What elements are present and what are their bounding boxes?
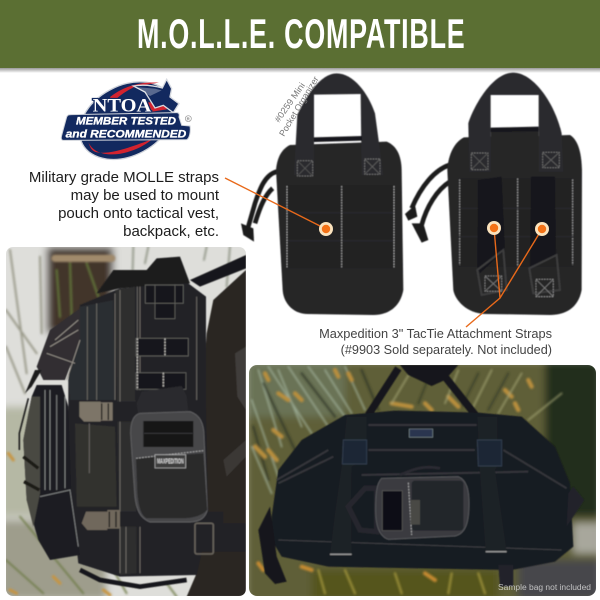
photo: duffel bag with pouch bbox=[245, 360, 600, 600]
upper side pocket bbox=[37, 308, 80, 380]
pouch model label: Pocket Organizer bbox=[277, 75, 321, 138]
lower side pocket bbox=[23, 385, 80, 560]
compression straps bbox=[332, 541, 352, 544]
pouch: back view with TacTie straps bbox=[405, 73, 582, 315]
title: M.O.L.L.E. COMPATIBLE bbox=[137, 11, 465, 58]
shoulder strap bbox=[190, 255, 246, 287]
strap over the pouch bbox=[156, 386, 184, 412]
person beside the backpack bbox=[187, 270, 246, 597]
mini pouch on backpack bbox=[131, 412, 207, 522]
MOLLE straps description: pouch onto tactical vest, bbox=[58, 205, 219, 222]
TacTie caption: (#9903 Sold separately. Not included) bbox=[341, 343, 552, 357]
orange callout: TacTie straps bbox=[466, 221, 549, 327]
pouch: front view bbox=[241, 73, 403, 315]
pouch model label: #0259 Mini bbox=[272, 81, 307, 124]
backpack top bbox=[97, 257, 190, 293]
NTOA logo: R bbox=[187, 116, 191, 121]
backpack main bbox=[68, 283, 208, 577]
NTOA logo: MEMBER TESTED bbox=[76, 116, 176, 128]
MOLLE straps description: may be used to mount bbox=[71, 187, 220, 204]
NTOA logo: NTOA bbox=[93, 95, 152, 116]
photo: backpack with pouch bbox=[0, 240, 253, 600]
photo note: Sample bag not included bbox=[498, 583, 591, 592]
photo: backpack with pouch: MAXPEDITION bbox=[157, 457, 184, 466]
duffel body bbox=[272, 411, 573, 570]
MOLLE straps description bbox=[29, 169, 220, 240]
NTOA logo bbox=[61, 66, 191, 175]
buckles bbox=[342, 440, 367, 464]
NTOA logo: and RECOMMENDED bbox=[66, 128, 186, 140]
MOLLE straps description: Military grade MOLLE straps bbox=[29, 169, 219, 186]
header banner bbox=[0, 0, 600, 73]
TacTie caption bbox=[319, 326, 552, 357]
duffel handles bbox=[368, 368, 477, 417]
buckles and straps bbox=[118, 401, 245, 552]
MOLLE straps description: backpack, etc. bbox=[123, 223, 219, 240]
orange callout: MOLLE straps bbox=[225, 178, 333, 236]
webbing on backpack bbox=[136, 285, 188, 389]
mini pouch on duffel bbox=[348, 488, 377, 532]
TacTie caption: Maxpedition 3" TacTie Attachment Straps bbox=[319, 326, 552, 341]
